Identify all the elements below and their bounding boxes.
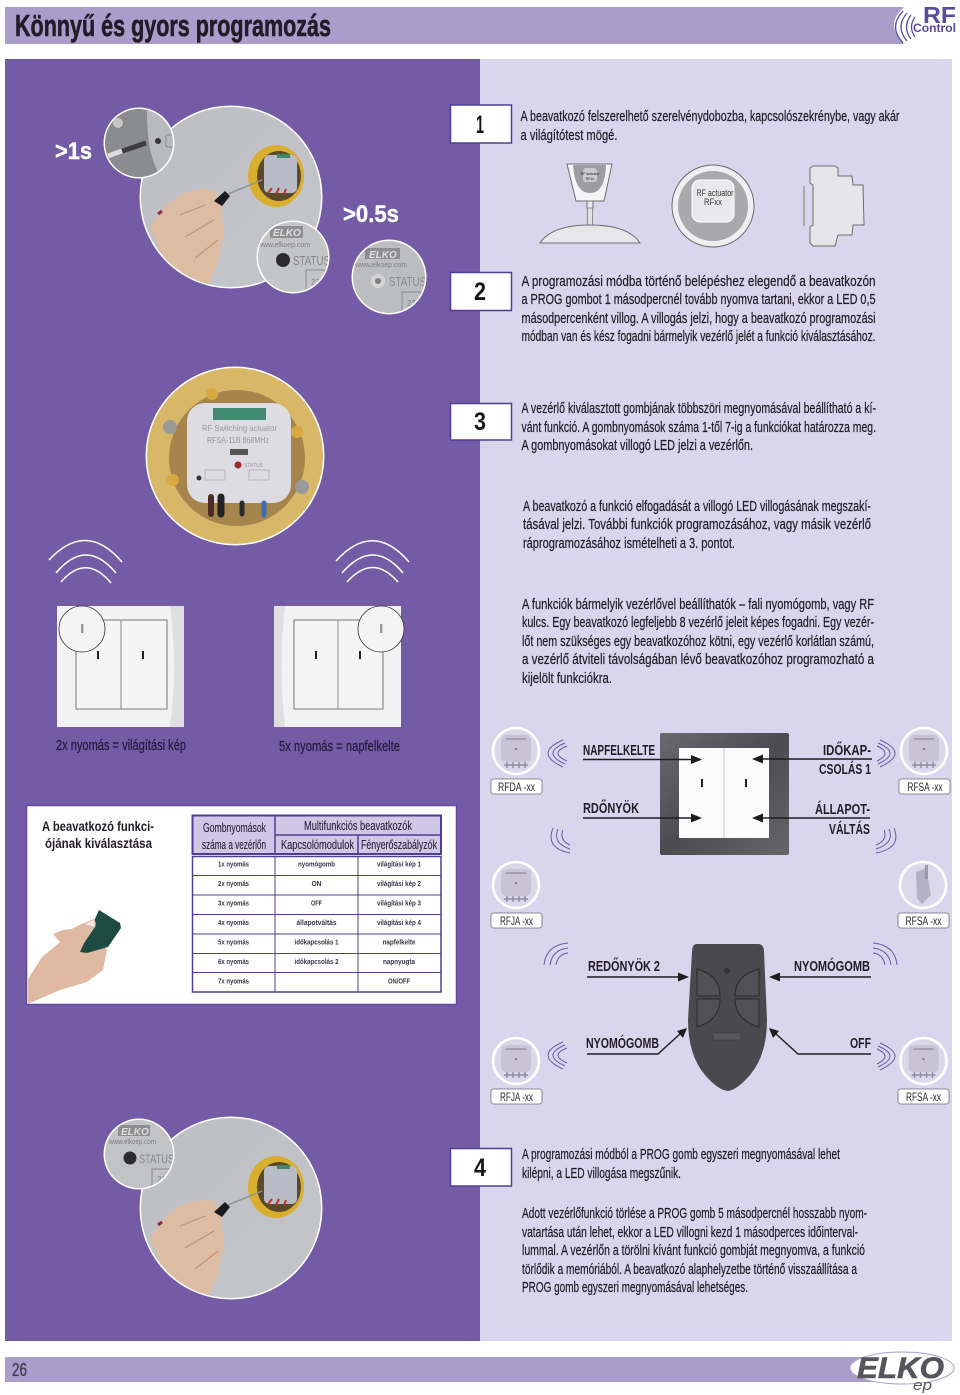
table: világítási kép 1 [377,860,422,868]
receiver: RFSA bottom right: RFSA -xx [906,1090,941,1104]
dark wall switch [660,733,789,855]
caption: 2x press: 2x nyomás = világítási kép [56,738,186,754]
callouts: wall switch: IDŐKAP- [823,741,871,759]
table: állapotváltás [296,918,336,927]
table: ON/OFF [388,976,410,986]
step 3 text [522,401,876,454]
icon: lamp: RF actuator [581,172,600,176]
panel: purple left column [5,59,480,1341]
table: 2x nyomás [218,879,249,888]
callouts: wall switch: VÁLTÁS [829,821,870,838]
receiver: RFDA top left [491,728,542,794]
logo: ELKO ep [850,1352,954,1394]
header bar [5,7,904,44]
delete function text: PROG gomb egyszeri megnyomásával lehetséges. [522,1280,748,1296]
logo: ELKO ep: ep [913,1377,932,1394]
step 3 text: A gombnyomásokat villogó LED jelzi a vezérlőn. [522,438,753,454]
step 1 number: 1 [476,111,484,139]
photo detail: status LED off [255,220,331,296]
table: Gombnyomások [203,821,267,835]
step 4 text [522,1147,840,1182]
photo detail: status LED [104,1118,174,1190]
photo detail: status LED off: www.elkoep.com [257,240,310,249]
panel heading [42,819,154,851]
photo detail: status LED blinking: 23 [407,299,416,308]
icon: radio waves around controllers [544,740,897,1070]
logo: RF Control: RF [923,2,956,28]
photo detail: status LED blinking: www.elkoep.com [354,260,407,269]
table: Kapcsolómodulok [281,838,355,852]
receiver: RFSA middle right: RFSA -xx [906,914,942,928]
icon: wall box with actuator: RF actuator [696,188,734,198]
receiver: RFJA bottom left [491,1038,542,1104]
photo detail: status LED off: 23 [311,278,320,287]
table: napfelkelte [382,938,416,946]
step 2 number: 2 [474,278,486,306]
table: világítási kép 4 [377,918,422,927]
photo detail: status LED blinking: ELKO [369,250,397,261]
callouts: wall switch: RDŐNYÖK [583,799,639,817]
confirmation text: tásával jelzi. További funkciók programozásához, vagy másik vezérlő [523,517,871,533]
photo detail: status LED: STATUS [139,1152,174,1166]
photo detail: status LED off: STATUS [293,254,330,268]
step 2 text: A programozási módba történő belépéshez elegendő a beavatkozón [522,274,876,290]
confirmation text [523,499,871,552]
step 1 number [450,105,512,143]
icon: radio waves right [336,541,409,582]
wall switch right [274,606,404,727]
icon: lamp [540,164,640,243]
callouts: wall switch [583,741,872,838]
table: 4x nyomás [218,918,249,927]
photo: hand with remote [28,910,121,1003]
photo: actuator in wall box: RFSA-11B 868MHz [207,436,269,445]
delete function text [522,1206,867,1296]
receiver: RFSA top right [899,728,950,794]
receiver: RFJA middle left: RFJA -xx [500,914,533,928]
photo: actuator in wall box: RF Switching actuator [202,424,277,433]
photo detail: PROG button [104,108,174,178]
step 2 text [522,274,876,345]
table: 6x nyomás [218,957,249,966]
callouts: remote: OFF [850,1036,871,1052]
step 4 number: 4 [474,1154,486,1182]
step 3 number [450,404,512,440]
table: időkapcsolás 1 [294,938,339,946]
label: >0.5s: >0.5s [343,201,399,228]
table: 3x nyomás [218,898,249,908]
photo: actuator in wall box: STATUS [244,463,264,469]
photo: actuator in wall box [146,366,324,546]
receiver: RFJA middle left [491,862,542,928]
footer bar [5,1357,885,1382]
receiver: RFSA top right: RFSA -xx [908,780,942,794]
page number: 26 [12,1360,27,1380]
table: 7x nyomás [218,976,249,986]
table: OFF [311,898,322,908]
wall switch left [57,606,184,727]
logo: ELKO ep: ELKO [857,1352,944,1385]
photo detail: status LED: www.elkoep.com [108,1137,156,1146]
table: 5x nyomás [218,938,249,946]
photo detail: status LED off: ELKO [273,228,301,239]
label: >1s: >1s [55,138,92,165]
panel: lilac right column [480,59,952,1341]
photo: screwdriver pressing PROG [140,106,322,288]
receiver: RFJA bottom left: RFJA -xx [500,1090,533,1104]
photo detail: status LED: ELKO [121,1127,149,1138]
caption: 5x press: 5x nyomás = napfelkelte [279,739,400,755]
icon: DIN rail module [803,166,864,246]
table: nyomógomb [298,860,335,868]
callouts: remote [586,957,871,1054]
step 1 text: a világítótest mögé. [520,128,618,144]
controllers text: a vezérlő átviteli távolságában lévő beavatkozóhoz programozható a [522,652,875,668]
controllers text [522,597,875,687]
panel heading: A beavatkozó funkci- [42,819,154,834]
table: Multifunkciós beavatkozók [304,819,413,833]
icon: wall box with actuator: RFxx [704,197,722,207]
step 4 text: kilépni, a LED villogása megszűnik. [522,1166,681,1182]
receiver: RFSA middle right [898,862,949,928]
title: Könnyű és gyors programozás [15,8,331,43]
photo detail: status LED blinking [350,238,428,316]
callouts: remote: REDŐNYÖK 2 [588,957,660,975]
callouts: wall switch: CSOLÁS 1 [819,761,871,778]
table: Fényerőszabályzók [361,838,438,852]
logo: RF Control: Control [913,21,956,35]
step 3 number: 3 [474,408,486,436]
icon: radio waves left [49,540,122,583]
table: ON [312,879,322,888]
photo: exiting programming mode [140,1116,322,1300]
confirmation text: ráprogramozásához ismételheti a 3. pontot. [523,536,735,552]
step 1 text [520,109,900,144]
controllers text: kijelölt funkciókra. [522,671,612,687]
receiver: RFSA bottom right [898,1038,949,1104]
callouts: wall switch: ÁLLAPOT- [815,801,870,818]
table: időkapcsolás 2 [294,957,338,966]
table [192,815,441,992]
table: 1x nyomás [218,860,249,868]
icon: wall box with actuator [672,165,754,247]
step 4 number [450,1148,512,1186]
table: világítási kép 3 [377,898,421,908]
panel heading: ójának kiválasztása [45,836,152,851]
remote control [688,944,767,1091]
callouts: remote: NYOMÓGOMB [586,1034,659,1052]
table: világítási kép 2 [377,879,421,888]
panel: function selection [26,806,456,1004]
table: száma a vezérlőn [202,838,266,852]
receiver: RFDA top left: RFDA -xx [498,780,535,794]
table: napnyugta [383,957,416,966]
logo: RF Control [896,2,956,43]
photo detail: status LED: 23 [157,1175,166,1184]
callouts: remote: NYOMÓGOMB [794,957,870,975]
callouts: wall switch: NAPFELKELTE [583,743,655,759]
step 2 number [450,272,512,310]
photo detail: status LED blinking: STATUS [389,275,426,289]
icon: lamp: RFxx [586,177,594,181]
